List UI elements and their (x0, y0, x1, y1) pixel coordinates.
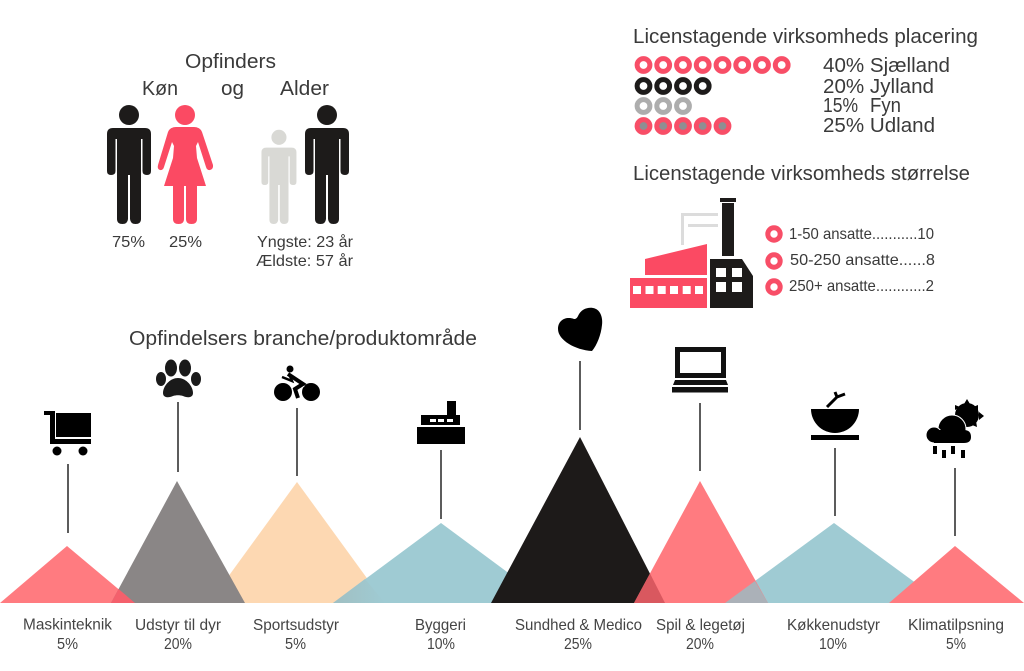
label: Jylland: 20% Jylland (823, 76, 934, 98)
rings: Jylland (637, 80, 709, 92)
heading: og: og (221, 78, 244, 100)
chart: industry triangles (0, 437, 1024, 603)
triangle: Spil og legetøj (634, 481, 768, 603)
rings: Udland (637, 120, 729, 132)
label: youngest age: Yngste: 23 år (257, 233, 354, 251)
overlap: games and kitchen (725, 581, 768, 603)
label: Køkkenudstyr: Køkkenudstyr (787, 617, 881, 634)
label: oldest age: Ældste: 57 år (256, 252, 354, 270)
triangle: Byggeri (333, 523, 549, 603)
heading: Opfinders: Opfinders (185, 51, 276, 73)
overlap: health and games (634, 574, 665, 603)
icon: oldest person (305, 105, 349, 224)
heading: Køn: Køn (142, 78, 178, 100)
label: Byggeri percent: 10% (427, 636, 455, 653)
label: Udstyr percent: 20% (164, 636, 192, 653)
rings: Fyn (637, 100, 689, 112)
triangle: Udstyr til dyr (111, 481, 245, 603)
label: 25%: 25% (169, 234, 202, 251)
label: Sportsudstyr percent: 5% (285, 636, 306, 653)
label: Fyn (823, 95, 901, 117)
label: Maskinteknik percent: 5% (57, 636, 78, 653)
overlap: machinery and animal (111, 589, 135, 603)
label: Klima percent: 5% (946, 636, 966, 653)
label: Sundhed og Medico: Sundhed & Medico (515, 617, 642, 634)
label: Spil og legetøj: Spil & legetøj (656, 617, 745, 634)
label: 50-250: 50-250 ansatte......8 (790, 252, 935, 269)
icon: weather (926, 399, 984, 458)
icon: heart (558, 308, 602, 351)
icon: factory (630, 198, 753, 308)
icon: laptop (672, 347, 728, 392)
label: Sjælland: 40% Sjælland (823, 55, 950, 77)
label: Sportsudstyr: Sportsudstyr (253, 617, 340, 634)
label: Udland: 25% Udland (823, 115, 935, 137)
triangle: Maskinteknik (0, 546, 135, 603)
triangle: Køkkenudstyr (725, 523, 943, 603)
label: Fyn: 15% (823, 95, 858, 117)
triangle: Klimatilpsning (889, 546, 1024, 603)
stems (68, 361, 955, 536)
icon: ship (417, 401, 465, 444)
heading: industry: Opfindelsers branche/produktområde (129, 328, 477, 350)
heading: location: Licenstagende virksomheds placering (633, 26, 978, 48)
label: 75%: 75% (112, 234, 145, 251)
icon: cyclist (274, 366, 320, 401)
label: Maskinteknik: Maskinteknik (23, 616, 113, 634)
heading: size: Licenstagende virksomheds størrelse (633, 163, 970, 185)
icon: woman 25% (158, 105, 213, 224)
panel: licensee location (633, 26, 978, 137)
label: Fyn: Fyn (870, 95, 901, 117)
label: Udstyr til dyr: Udstyr til dyr (135, 617, 222, 634)
label: Klimatilpsning: Klimatilpsning (908, 617, 1004, 634)
label: Køkken percent: 10% (819, 636, 847, 653)
heading: Alder: Alder (280, 78, 329, 100)
panel: licensee size (630, 163, 970, 308)
icon: youngest person (261, 130, 296, 224)
label: 1-50: 1-50 ansatte...........10 (789, 226, 934, 243)
overlap: sports and construction (333, 579, 385, 603)
label: Sundhed percent: 25% (564, 636, 592, 653)
label: Spil percent: 20% (686, 636, 714, 653)
label: Byggeri: Byggeri (415, 617, 466, 634)
labels: industries (23, 616, 1004, 653)
rings: Sjælland (637, 59, 788, 71)
icon: shopping cart (44, 411, 91, 456)
triangle: Sportsudstyr (209, 482, 385, 603)
icon: man 75% (107, 105, 151, 224)
panel: inventor gender and age (107, 51, 354, 270)
triangle: Sundhed og Medico (491, 437, 665, 603)
icon: paw (156, 360, 201, 397)
icon: mortar and pestle (811, 392, 859, 440)
label: 250+: 250+ ansatte............2 (789, 278, 934, 295)
rings: size bullets (768, 228, 780, 293)
